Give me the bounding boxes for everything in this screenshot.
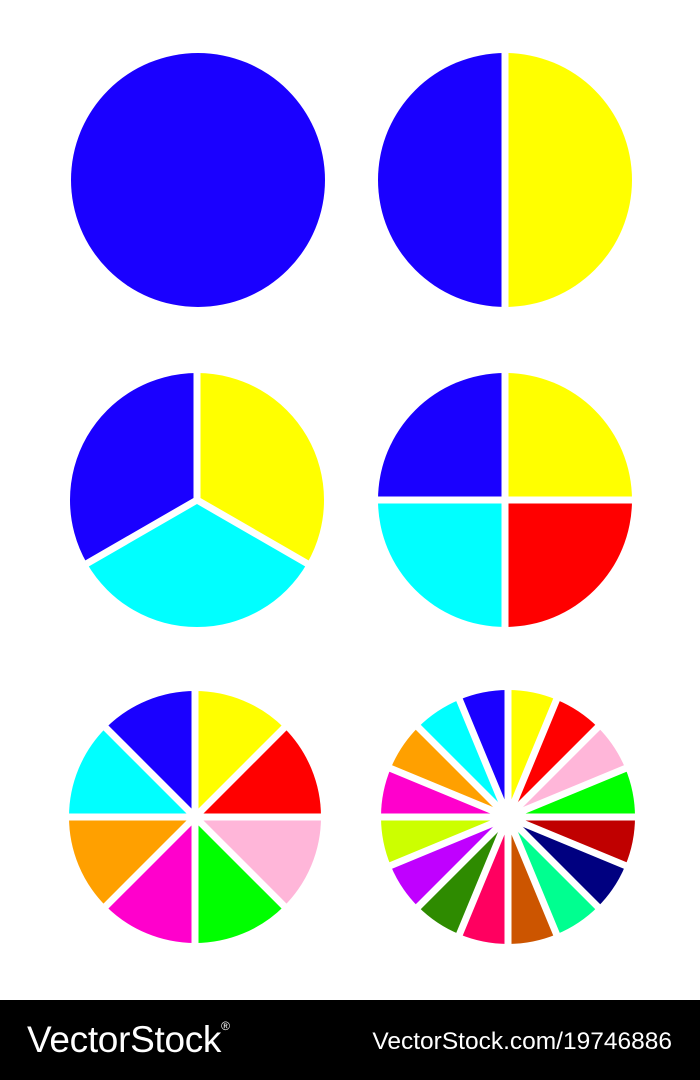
- pie: eighths: [61, 683, 329, 951]
- pie: quarters: [370, 365, 640, 635]
- pie: halves: [378, 45, 632, 315]
- footer url text: VectorStock.com/19746886: [372, 1028, 672, 1055]
- footer logo text: VectorStock®: [27, 1019, 230, 1060]
- pie: whole circle: [71, 53, 325, 307]
- pie: thirds: [70, 365, 324, 627]
- pie: sixteenths: [371, 680, 645, 954]
- footer bar: [0, 1000, 700, 1080]
